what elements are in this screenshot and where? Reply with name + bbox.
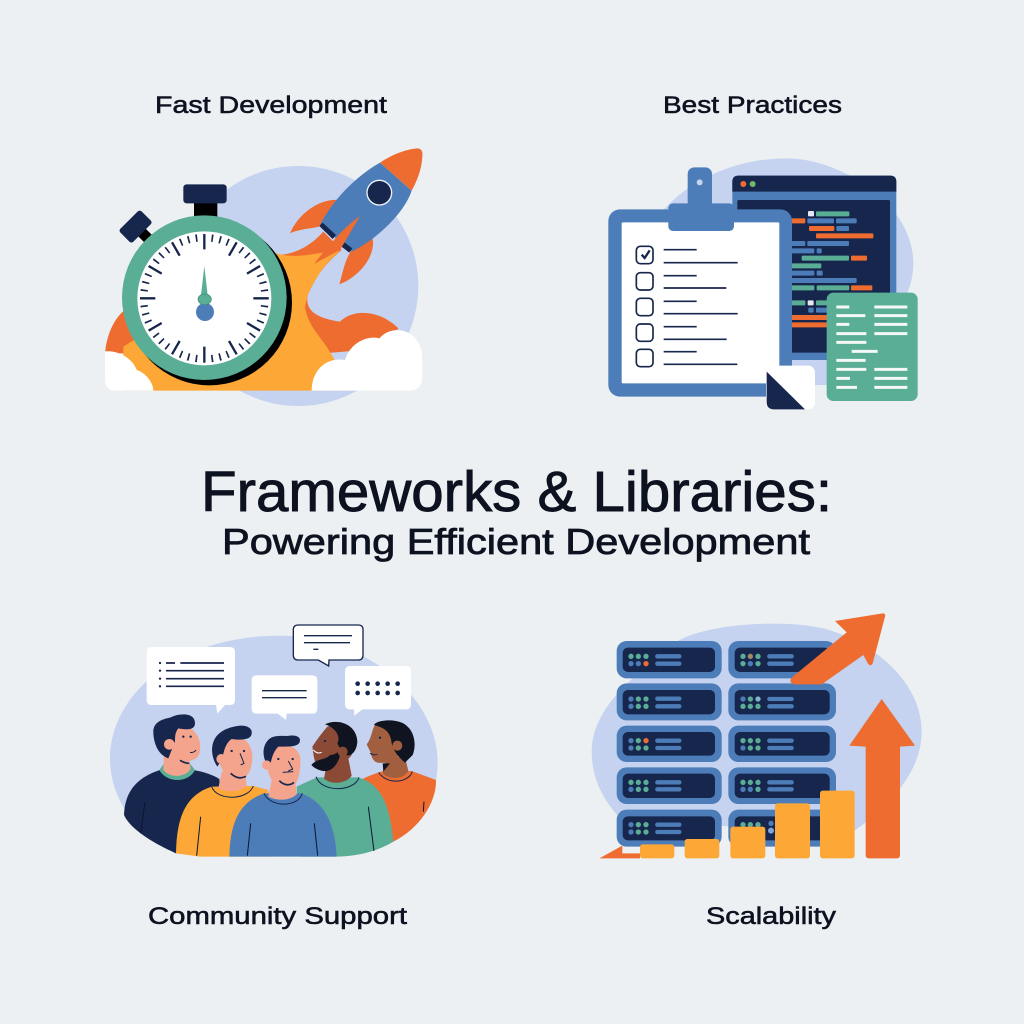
rocket xyxy=(290,148,422,284)
title: Frameworks & Libraries: xyxy=(201,460,832,524)
checklist lines xyxy=(664,250,738,364)
subtitle: Powering Efficient Development xyxy=(222,521,810,562)
case shadow xyxy=(127,220,292,385)
code lines xyxy=(790,211,873,327)
folded corner xyxy=(766,366,815,409)
dial face xyxy=(137,231,271,365)
heading: community support: Community Support xyxy=(148,903,407,930)
person 4: green sweater xyxy=(297,722,393,857)
minor ticks xyxy=(144,238,265,359)
white clouds xyxy=(105,330,422,391)
diagonal growth arrow xyxy=(790,613,885,684)
code editor window xyxy=(732,176,896,360)
background blob xyxy=(110,636,438,857)
status lines xyxy=(657,656,792,832)
panel: scalability illustration xyxy=(592,613,922,858)
upward arrow xyxy=(849,699,915,858)
checklist boxes xyxy=(636,246,653,367)
speech bubble: outlined top xyxy=(293,625,363,666)
background circle xyxy=(178,166,418,406)
small orange baseline wedge xyxy=(599,846,640,858)
background blob xyxy=(592,624,922,832)
status lights xyxy=(628,654,774,835)
heading: scalability: Scalability xyxy=(706,903,837,930)
panel: fast development illustration xyxy=(105,148,422,406)
green document xyxy=(827,293,918,401)
stopwatch xyxy=(118,184,292,385)
panel: best practices illustration xyxy=(608,158,918,409)
person 3: blue sweater xyxy=(229,736,337,857)
side button xyxy=(118,209,159,250)
server rack xyxy=(617,641,836,847)
major ticks xyxy=(140,234,269,363)
speech bubble: middle xyxy=(252,675,317,720)
speech bubble: dots xyxy=(345,666,411,716)
clipboard xyxy=(608,167,792,397)
heading: fast development: Fast Development xyxy=(155,92,387,119)
heading: best practices: Best Practices xyxy=(663,92,842,119)
person 1: navy sweater xyxy=(124,714,227,855)
person 5: orange sweater xyxy=(363,720,436,848)
clip xyxy=(688,167,712,211)
bar chart xyxy=(640,791,855,858)
panel: community support illustration xyxy=(110,625,438,857)
background blob xyxy=(663,158,913,385)
person 2: yellow sweater xyxy=(176,726,270,857)
speech bubble: list xyxy=(147,647,235,714)
rocket exhaust flame xyxy=(105,232,398,391)
green case xyxy=(122,215,287,380)
hands xyxy=(201,266,208,295)
top crown xyxy=(194,200,217,220)
